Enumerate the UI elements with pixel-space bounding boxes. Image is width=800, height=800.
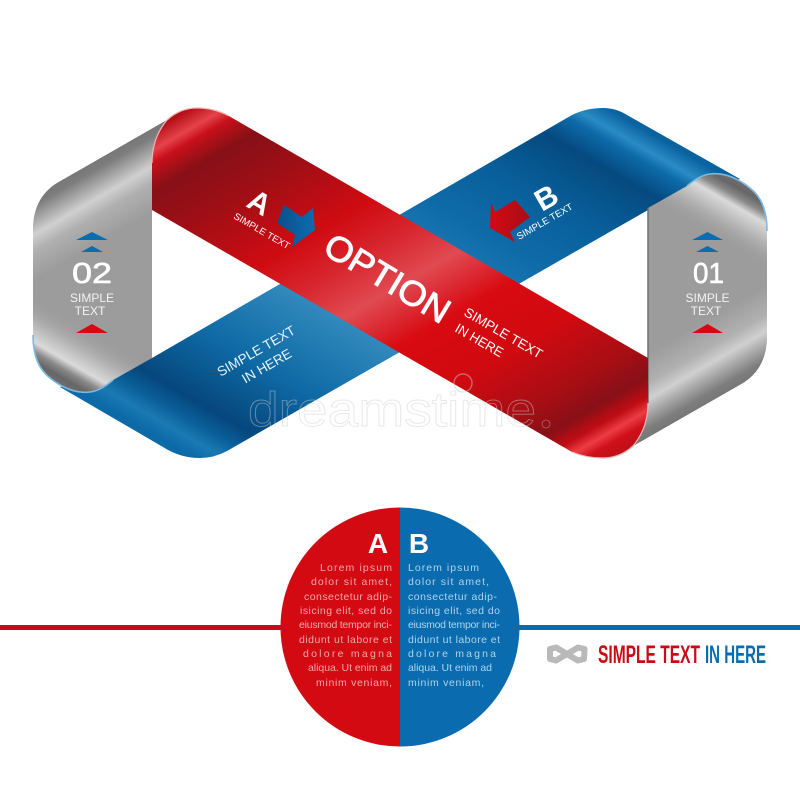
text block on blue band: IN HERE [239,346,294,386]
lorem text: red half: dolor sit amet, [311,576,392,588]
text block on red band: IN HERE [452,321,506,360]
lorem text: blue half: eiusmod tempor inci- [408,619,500,631]
label: simple text: SIMPLE [70,291,114,305]
right panel content: 01 [685,232,730,333]
caption: B simple text: SIMPLE TEXT [515,201,575,243]
circle letter B: B [409,528,429,559]
icon: blue arrow [277,205,315,247]
icon: red triangle [692,324,723,333]
lorem text: blue half: dolore magna [408,648,496,660]
letter B on blue band: B [529,179,564,218]
lorem text: blue half: consectetur adip- [408,591,498,603]
lorem text: blue half: minim veniam, [408,677,484,689]
lorem text: blue half [408,562,500,689]
left red divider line [0,625,282,630]
lorem text: red half: Lorem ipsum [320,562,392,574]
icon: red arrow [490,200,530,242]
watermark [248,374,550,437]
letter A on red band: A [242,183,277,223]
lorem text: blue half: didunt ut labore et [408,634,500,646]
lorem text: blue half: Lorem ipsum [408,562,479,574]
lorem text: red half: didunt ut labore et [299,634,392,646]
left grey fold panel [33,120,167,392]
label: simple text: SIMPLE [685,291,730,305]
label: second line: TEXT [75,304,106,318]
lorem text: blue half: isicing elit, sed do [408,605,500,617]
footer label: SIMPLE TEXT [598,641,700,669]
lorem text: red half: dolore magna [303,648,392,660]
blue ribbon band [60,108,740,458]
circle: red half [280,508,400,746]
number 01: 01 [693,258,724,290]
icon: blue triangle large [692,232,723,240]
icon: grey infinity logo [550,648,584,660]
lorem text: red half: isicing elit, sed do [300,605,392,617]
lorem text: red half: eiusmod tempor inci- [299,619,392,631]
icon: red triangle [76,324,108,333]
circle letter A: A [368,528,388,559]
caption: A simple text: SIMPLE TEXT [232,211,292,252]
lorem text: red half: consectetur adip- [304,591,392,603]
heading: OPTION: OPTION [317,226,457,331]
right blue divider line [518,625,800,630]
icon: blue triangle small [696,246,719,252]
watermark: dreamstime [248,384,536,437]
left panel content: 02 [70,232,114,333]
lorem text: red half: minim veniam, [316,677,392,689]
lorem text: red half [299,562,392,689]
circle panel [280,508,520,746]
label: second line: TEXT [691,304,722,318]
number 02: 02 [72,258,112,290]
lorem text: blue half: aliqua. Ut enim ad [408,662,492,674]
red ribbon band [152,108,648,458]
lorem text: red half: aliqua. Ut enim ad [308,662,392,674]
circle: blue half [400,508,520,746]
icon: blue triangle large [76,232,108,240]
icon: blue triangle small [81,246,103,252]
right grey fold panel [633,174,767,446]
text block on red band: SIMPLE TEXT [462,305,545,362]
text block on blue band: SIMPLE TEXT [215,323,298,379]
lorem text: blue half: dolor sit amet, [408,576,489,588]
